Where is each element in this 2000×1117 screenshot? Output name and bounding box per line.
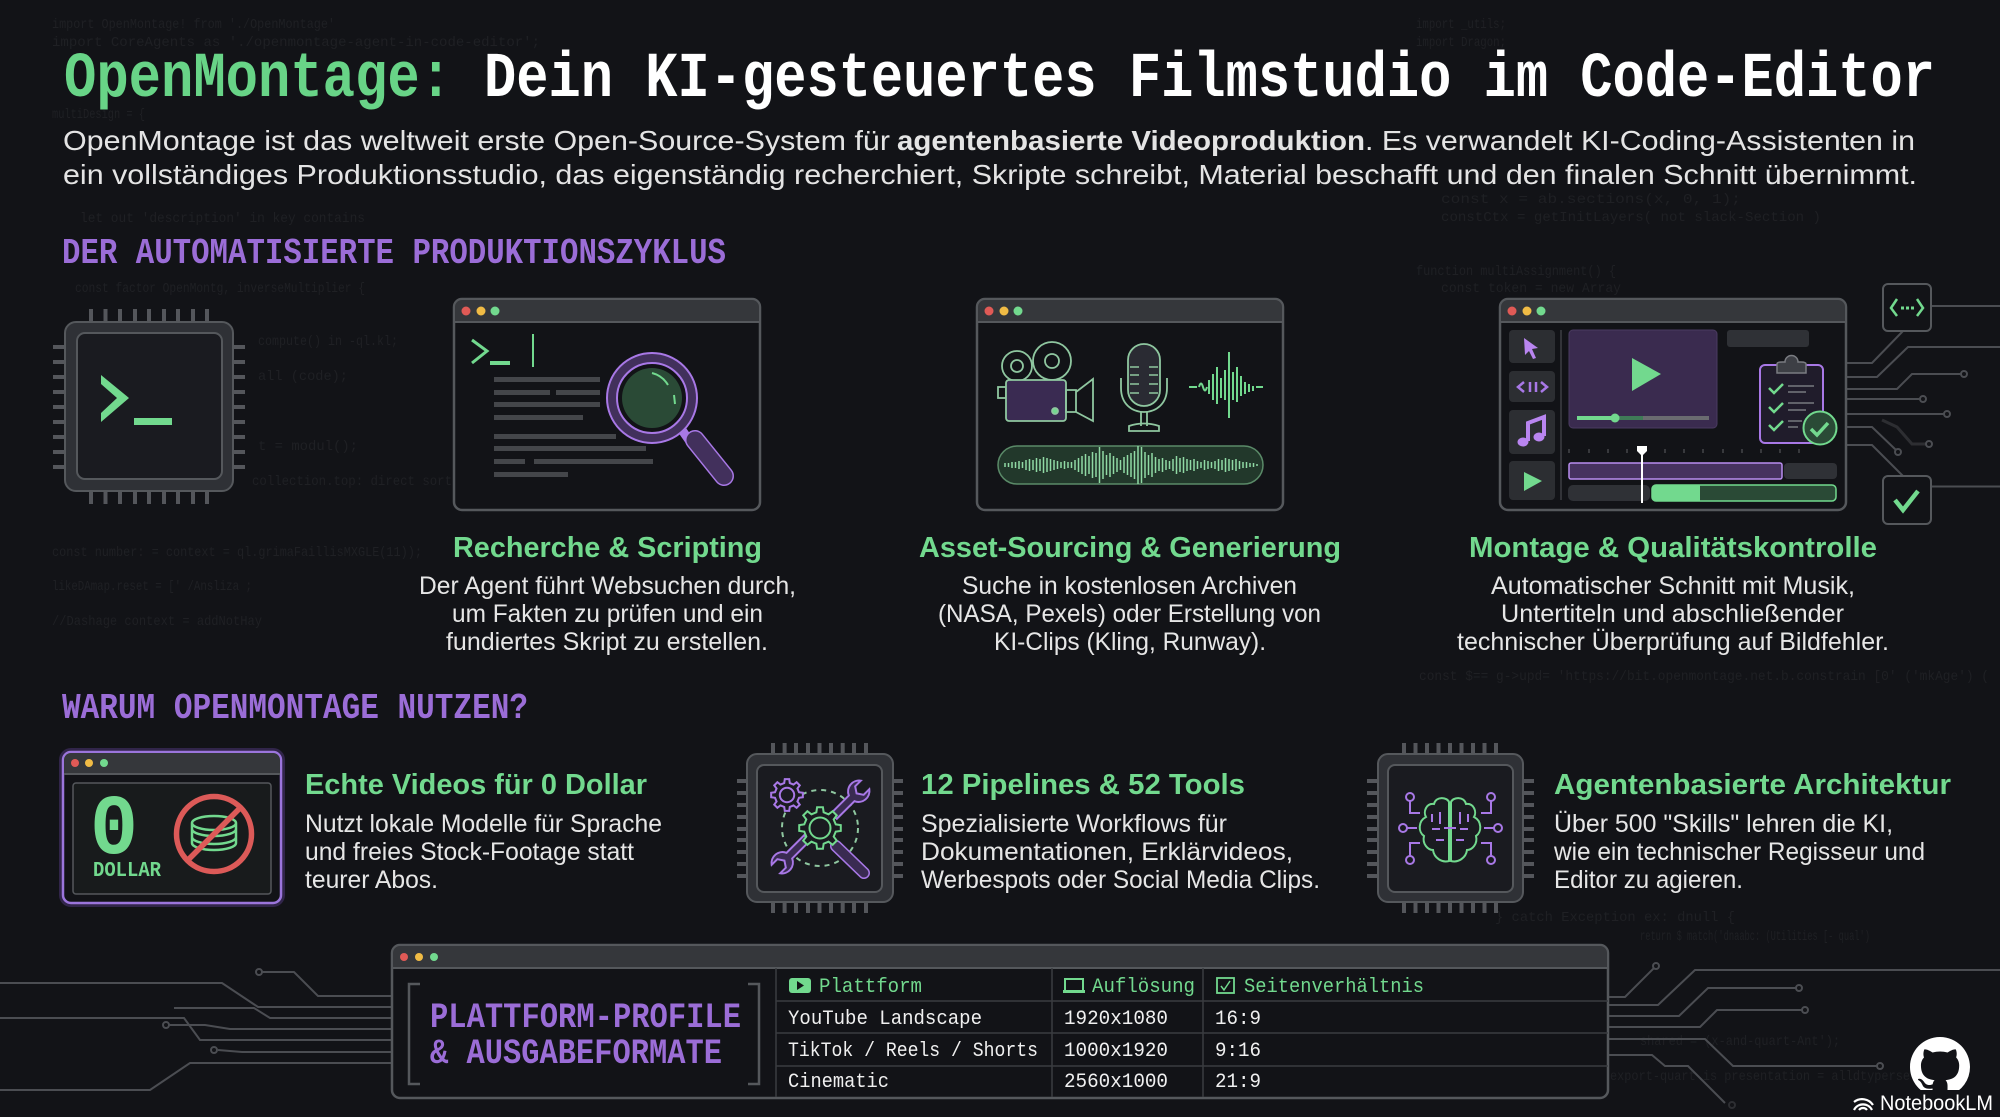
text: pipelines description: Spezialisierte Workflows für <box>921 810 1227 838</box>
background code texture: const factor OpenMontg, inverseMultiplier { <box>75 281 365 297</box>
text: research description: um Fakten zu prüfen und ein <box>452 600 763 628</box>
text: pipelines description: Dokumentationen, Erklärvideos, <box>921 838 1293 866</box>
table rows: 1920x1080 <box>1064 1008 1168 1031</box>
text: montage description: technischer Überprüfung auf Bildfehler. <box>1457 628 1889 656</box>
circuit lines: bottom right <box>1608 963 2000 1108</box>
background code texture: likeDAmap.reset = [' /Ansliza ; <box>52 579 252 595</box>
icon: magnifying glass <box>607 353 724 476</box>
table header <box>789 976 1424 999</box>
table rows <box>788 1008 1261 1094</box>
background code texture: } catch Exception ex: dnull { <box>1495 910 1735 926</box>
panel: montage window <box>1500 299 1846 510</box>
text: zero dollar description <box>305 810 662 894</box>
table rows: TikTok / Reels / Shorts <box>788 1040 1038 1063</box>
text: assets description: (NASA, Pexels) oder Erstellung von <box>938 600 1321 628</box>
circuit lines: right of montage window <box>1846 306 2000 486</box>
icon: no coins <box>176 796 252 872</box>
background code texture: return $ match('dnaabc: (Utilities [- qual') <box>1640 929 1870 945</box>
section heading: why: WARUM OPENMONTAGE NUTZEN? <box>62 688 528 729</box>
zero label: 0 <box>90 782 138 879</box>
bracketed table title: & AUSGABEFORMATE <box>430 1034 722 1074</box>
icon: code tag box <box>1883 284 1931 331</box>
panel: asset window <box>977 299 1283 510</box>
tool sidebar <box>1509 330 1561 500</box>
table header: Auflösung <box>1092 976 1195 999</box>
intro text: . Es verwandelt KI-Coding-Assistenten in <box>1365 125 1915 156</box>
background code texture: //Dashage context = addNotHay <box>52 614 262 630</box>
icon: waveform timeline pill <box>998 446 1263 484</box>
panel: research window <box>454 299 760 510</box>
heading: assets: Asset-Sourcing & Generierung <box>919 532 1341 564</box>
watermark: NotebookLM <box>1848 1090 2000 1117</box>
icon: audio waveform <box>1189 352 1263 418</box>
text: zero dollar description: teurer Abos. <box>305 866 438 894</box>
icon: film camera <box>998 342 1093 421</box>
title: OpenMontage: <box>64 44 452 116</box>
background code texture: compute() in -ql.kl; <box>258 334 398 350</box>
icon: purple gear <box>771 779 803 811</box>
document lines <box>494 377 653 477</box>
background code texture: all (code); <box>258 369 348 385</box>
background code texture: const number: = context = ql.grimaFaillisMXGLE(11)); <box>52 545 422 561</box>
bracketed table title <box>409 984 759 1084</box>
video preview <box>1569 330 1809 428</box>
background code texture: import OpenMontage! from './OpenMontage' <box>52 17 335 33</box>
text: zero dollar description: und freies Stock-Footage statt <box>305 838 634 866</box>
window frame <box>392 945 1608 1098</box>
background code texture: constCtx = getInitLayers( not slack-Section ) <box>1441 210 1821 226</box>
dollar label: DOLLAR <box>93 860 161 883</box>
panel: platform table window <box>392 945 1608 1098</box>
table header: Seitenverhältnis <box>1244 976 1424 999</box>
text: architecture description: Über 500 "Skills" lehren die KI, <box>1554 810 1893 838</box>
window frame <box>454 299 760 510</box>
table rows: 1000x1920 <box>1064 1040 1168 1063</box>
text: architecture description: Editor zu agieren. <box>1554 866 1743 894</box>
icon: github <box>1910 1037 1970 1096</box>
heading: pipelines: 12 Pipelines & 52 Tools <box>921 769 1245 801</box>
terminal prompt <box>472 334 534 367</box>
heading: research: Recherche & Scripting <box>453 532 762 564</box>
text: pipelines description <box>921 810 1320 894</box>
intro text: OpenMontage ist das weltweit erste Open-Source-System für <box>63 125 890 156</box>
intro text: ein vollständiges Produktionsstudio, das eigenständig recherchiert, Skripte schreibt, Material beschafft und den finalen Schnitt übernimmt. <box>63 159 1917 190</box>
heading: zero dollar: Echte Videos für 0 Dollar <box>305 769 647 801</box>
text: zero dollar description: Nutzt lokale Modelle für Sprache <box>305 810 662 838</box>
intro text <box>63 125 1917 190</box>
background code texture: import _utils; <box>1416 17 1506 33</box>
section heading: production cycle: DER AUTOMATISIERTE PRODUKTIONSZYKLUS <box>62 233 726 274</box>
icon: microphone <box>1121 344 1167 431</box>
table rows: Cinematic <box>788 1071 889 1094</box>
text: assets description: Suche in kostenlosen Archiven <box>962 572 1297 600</box>
text: montage description: Automatischer Schnitt mit Musik, <box>1491 572 1855 600</box>
background code texture: import Dragon; <box>1416 35 1506 51</box>
table grid <box>776 968 1608 1097</box>
text: architecture description <box>1553 810 1925 894</box>
icon: brain chip <box>1367 743 1534 913</box>
circuit lines: bottom left <box>0 969 392 1090</box>
bracketed table title: PLATTFORM-PROFILE <box>430 998 741 1038</box>
watermark: NotebookLM: NotebookLM <box>1880 1092 1993 1115</box>
background code texture: const token = new Array <box>1441 281 1621 297</box>
background code texture: collection.top: direct sort <box>252 474 452 490</box>
background code texture: let out 'description' in key contains <box>80 211 365 227</box>
table rows: YouTube Landscape <box>788 1008 982 1031</box>
icon: checklist clipboard <box>1760 356 1836 444</box>
background code texture: import CoreAgents as './openmontage-agent-in-code-editor'; <box>52 35 540 51</box>
window frame <box>977 299 1283 510</box>
icon: brain <box>1399 793 1502 864</box>
table rows: 9:16 <box>1215 1040 1261 1063</box>
text: research description: fundiertes Skript zu erstellen. <box>446 628 768 656</box>
timeline <box>1568 446 1837 503</box>
heading: architecture: Agentenbasierte Architektur <box>1554 769 1951 801</box>
text: montage description <box>1457 572 1889 656</box>
text: research description: Der Agent führt Websuchen durch, <box>419 572 796 600</box>
background code texture: function multiAssignment() { <box>1416 264 1616 280</box>
background code texture: t = modul(); <box>258 439 358 455</box>
text: assets description: KI-Clips (Kling, Runway). <box>994 628 1266 656</box>
heading: montage: Montage & Qualitätskontrolle <box>1469 532 1877 564</box>
table rows: 2560x1000 <box>1064 1071 1168 1094</box>
background code texture: shared = (x-and-quart-Ant'); <box>1640 1034 1840 1050</box>
icon: green gear <box>799 807 841 849</box>
icon: check box <box>1883 476 1931 524</box>
background code texture: export-quart is presentation = alldtyperse <box>1610 1069 1910 1085</box>
text: architecture description: wie ein technischer Regisseur und <box>1553 838 1925 866</box>
background code texture: const x = ab.sections(x, 0, 1); <box>1441 192 1741 208</box>
table header: Plattform <box>819 976 922 999</box>
window frame <box>1500 299 1846 510</box>
intro text: agentenbasierte Videoproduktion <box>897 125 1365 156</box>
icon: tools chip <box>737 743 903 913</box>
background code texture: multiDesign = { <box>52 107 145 123</box>
text: assets description <box>938 572 1321 656</box>
icon: zero dollar window <box>63 752 281 903</box>
icon: terminal chip <box>53 309 245 504</box>
icon: wrenches <box>768 777 873 877</box>
table rows: 16:9 <box>1215 1008 1261 1031</box>
table rows: 21:9 <box>1215 1071 1261 1094</box>
text: research description <box>419 572 796 656</box>
text: montage description: Untertiteln und abschließender <box>1501 600 1844 628</box>
text: pipelines description: Werbespots oder Social Media Clips. <box>921 866 1320 894</box>
